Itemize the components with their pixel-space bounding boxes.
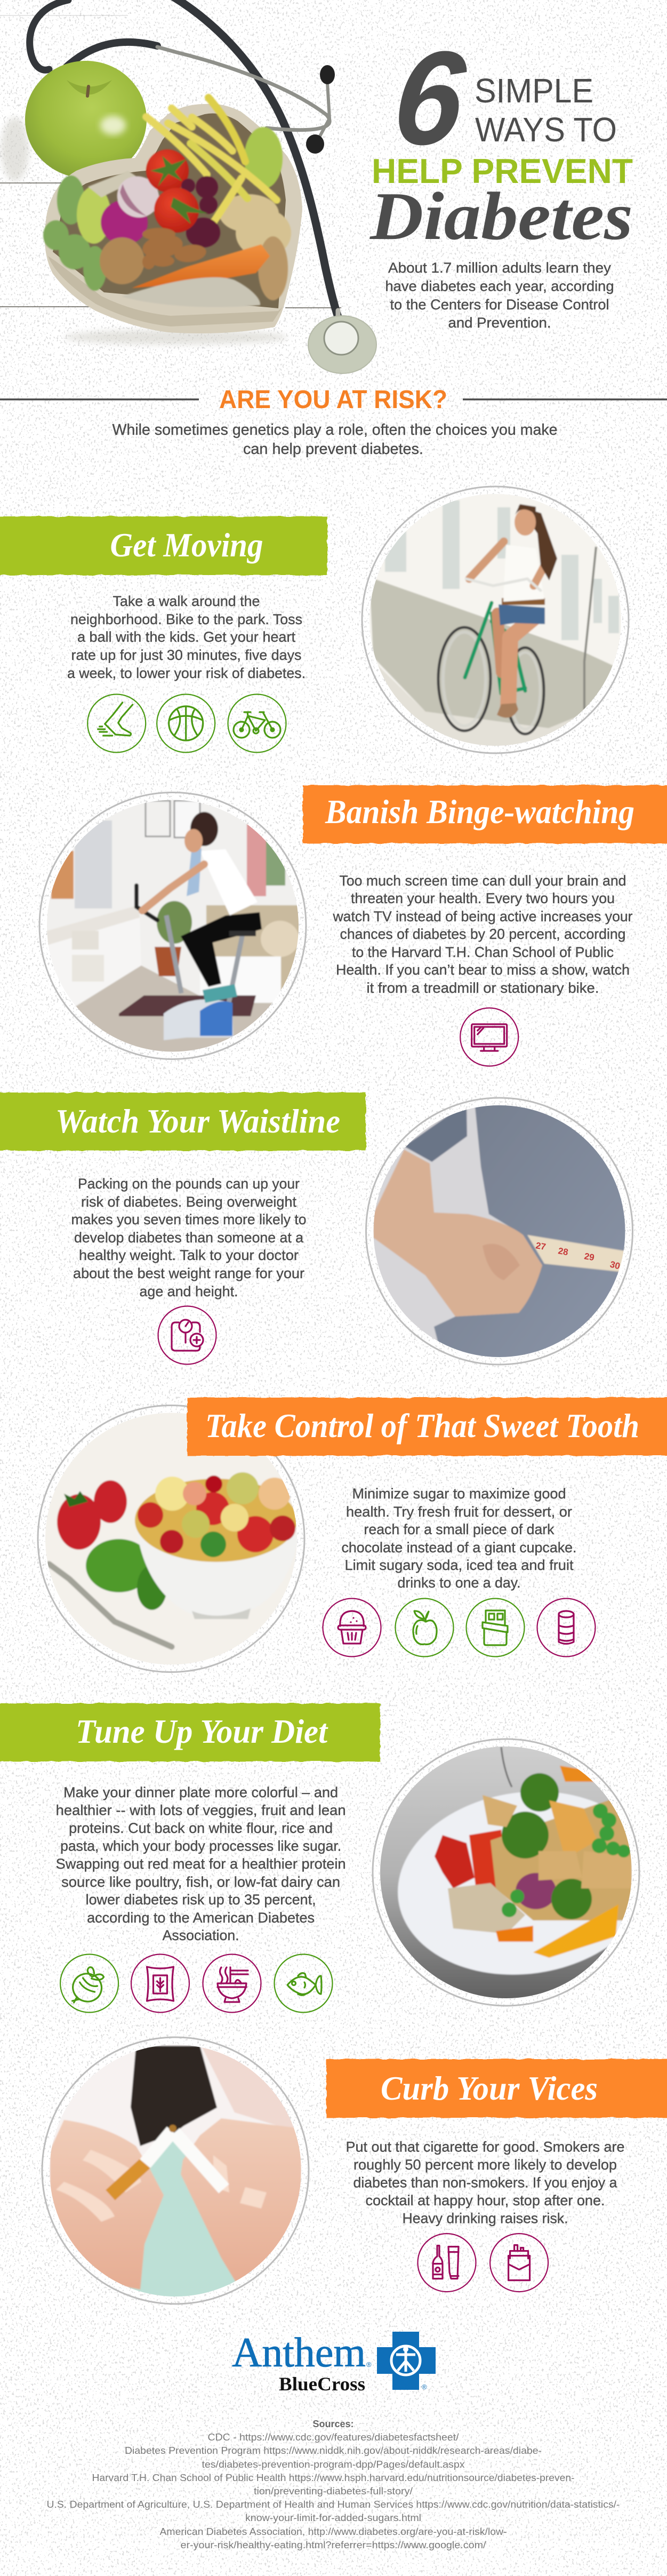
body text: sweet tooth: Limit sugary soda, iced tea and fruit	[344, 1557, 574, 1573]
body text: tune up your diet: Swapping out red meat for a healthier protein	[56, 1856, 346, 1872]
tape measure numbers: 28	[557, 1246, 569, 1257]
banner: get moving	[0, 516, 327, 575]
panel: tune up your diet	[0, 1703, 664, 2012]
body text: sweet tooth	[341, 1486, 577, 1591]
sources: Sources:	[312, 2418, 354, 2429]
photo: woman cycling	[362, 487, 629, 753]
risk intro text: can help prevent diabetes.	[243, 441, 423, 458]
photo: measuring waist	[366, 1098, 632, 1365]
panel: hero photo of heart bowl, apple and stethoscope	[0, 0, 376, 373]
icon: stethoscope	[30, 0, 376, 373]
body text: watch your waistline: about the best weight range for your	[73, 1265, 304, 1281]
body text: banish binge-watching	[333, 873, 633, 996]
body text: banish binge-watching: watch TV instead of being active increases your	[333, 908, 633, 924]
photo: vegetable and tofu plate	[373, 1739, 664, 2006]
tape measure numbers: 29	[583, 1251, 595, 1263]
sources: tes/diabetes-prevention-program-dpp/Pages/default.aspx	[202, 2459, 465, 2470]
body text: tune up your diet: proteins. Cut back on white flour, rice and	[69, 1820, 333, 1836]
section heading: are you at risk	[0, 386, 667, 414]
intro text: About 1.7 million adults learn they	[388, 260, 612, 276]
logo: registered mark left: ®	[366, 2360, 372, 2368]
banner: watch your waistline: Watch Your Waistline	[55, 1102, 340, 1140]
intro text: and Prevention.	[448, 315, 551, 331]
body text: sweet tooth: reach for a small piece of dark	[364, 1521, 555, 1537]
body text: tune up your diet: Make your dinner plate more colorful – and	[63, 1784, 338, 1800]
body text: tune up your diet	[56, 1784, 346, 1943]
intro text	[385, 260, 614, 331]
title line: diabetes: Diabetes	[369, 178, 633, 254]
body text: curb your vices: cocktail at happy hour, stop after one.	[366, 2192, 605, 2208]
body text: get moving: a week, to lower your risk of diabetes.	[67, 665, 306, 681]
wood plank gaps	[0, 15, 341, 308]
icon: cigarette pack	[490, 2234, 548, 2292]
icon: cupcake	[323, 1598, 381, 1657]
icon: bicycle	[228, 695, 286, 752]
icon: green apple	[25, 61, 147, 178]
banner: watch your waistline	[0, 1092, 366, 1151]
body text: tune up your diet: Association.	[163, 1927, 239, 1943]
body text: tune up your diet: lower diabetes risk up to 35 percent,	[86, 1892, 316, 1908]
logo: anthem bluecross	[232, 2329, 436, 2395]
risk intro text: While sometimes genetics play a role, often the choices you make	[112, 421, 558, 438]
body text: watch your waistline: healthy weight. Talk to your doctor	[79, 1247, 299, 1263]
body text: watch your waistline	[71, 1176, 306, 1299]
icon: soda can	[537, 1598, 595, 1657]
icon: chocolate bar	[466, 1598, 525, 1657]
photo: hands breaking cigarette	[42, 2037, 309, 2304]
title line: simple: SIMPLE	[475, 71, 593, 110]
logo: blue cross symbol	[377, 2332, 436, 2390]
body text: banish binge-watching: to the Harvard T.H. Chan School of Public	[352, 944, 614, 960]
sources: Harvard T.H. Chan School of Public Health https://www.hsph.harvard.edu/nutritionsource/diabetes-preven-	[92, 2472, 575, 2483]
body text: banish binge-watching: Health. If you can’t bear to miss a show, watch	[336, 962, 630, 978]
icon: basketball	[157, 695, 215, 752]
section heading: are you at risk: ARE YOU AT RISK?	[219, 386, 447, 414]
icon: apple	[396, 1598, 453, 1657]
banner: take control of that sweet tooth: Take Control of That Sweet Tooth	[205, 1407, 639, 1445]
body text: get moving	[67, 593, 306, 681]
banner: curb your vices	[326, 2059, 667, 2118]
banner: get moving: Get Moving	[110, 526, 263, 564]
sources: er-your-risk/healthy-eating.html?referrer=https://www.google.com/	[180, 2539, 486, 2550]
body text: tune up your diet: pasta, which your body processes like sugar.	[60, 1838, 341, 1854]
banner: banish binge-watching: Banish Binge-watching	[325, 793, 634, 831]
sources: American Diabetes Association, http://www.diabetes.org/are-you-at-risk/low-	[160, 2526, 507, 2537]
banner: take control of that sweet tooth	[187, 1398, 667, 1456]
body text: sweet tooth: chocolate instead of a giant cupcake.	[341, 1540, 577, 1556]
panel: watch your waistline	[0, 1092, 632, 1365]
title numeral 6: 6	[387, 24, 472, 173]
title line: help prevent: HELP PREVENT	[372, 151, 633, 190]
body text: tune up your diet: healthier -- with lots of veggies, fruit and lean	[56, 1803, 346, 1819]
panel: take control of that sweet tooth	[38, 1398, 667, 1672]
body text: watch your waistline: Packing on the pounds can up your	[78, 1176, 300, 1192]
body text: curb your vices: Put out that cigarette for good. Smokers are	[345, 2139, 625, 2155]
icon: bottle and glass	[418, 2234, 476, 2292]
body text: sweet tooth: Minimize sugar to maximize good	[352, 1486, 566, 1502]
bowl food	[43, 98, 291, 307]
icon: beet	[60, 1955, 118, 2012]
body text: curb your vices: roughly 50 percent more likely to develop	[353, 2157, 617, 2173]
body text: banish binge-watching: chances of diabetes by 20 percent, according	[340, 926, 626, 942]
body text: get moving: neighborhood. Bike to the park. Toss	[70, 611, 302, 627]
body text: curb your vices: diabetes than non-smokers. If you enjoy a	[353, 2174, 617, 2190]
heart bowl	[45, 104, 302, 333]
body text: banish binge-watching: threaten your health. Every two hours you	[351, 890, 615, 906]
icon: flour bag	[131, 1955, 189, 2012]
banner: tune up your diet: Tune Up Your Diet	[76, 1712, 328, 1750]
panel: get moving	[0, 487, 629, 753]
tape measure numbers	[535, 1242, 620, 1269]
body text: banish binge-watching: Too much screen time can dull your brain and	[339, 873, 626, 889]
shadow below bowl and apple	[1, 117, 288, 345]
body text: tune up your diet: according to the American Diabetes	[87, 1910, 315, 1926]
intro text: have diabetes each year, according	[385, 278, 614, 294]
body text: curb your vices: Heavy drinking raises risk.	[402, 2211, 568, 2227]
sources: know-your-limit-for-added-sugars.html	[245, 2512, 421, 2523]
body text: watch your waistline: makes you seven times more likely to	[71, 1211, 306, 1227]
body text: banish binge-watching: it from a treadmill or stationary bike.	[367, 980, 599, 996]
body text: watch your waistline: develop diabetes than someone at a	[74, 1230, 304, 1246]
photo: fruit salad bowl	[38, 1405, 304, 1672]
banner: tune up your diet	[0, 1703, 380, 1761]
logo wordmark: bluecross: BlueCross	[279, 2373, 365, 2395]
tape measure numbers: 27	[535, 1240, 547, 1252]
sources: tion/preventing-diabetes-full-story/	[254, 2485, 413, 2497]
body text: get moving: rate up for just 30 minutes, five days	[71, 647, 302, 663]
icon: television	[460, 1008, 518, 1066]
body text: tune up your diet: source like poultry, fish, or low-fat dairy can	[61, 1874, 340, 1890]
risk intro text	[112, 421, 558, 458]
panel: curb your vices	[42, 2037, 667, 2304]
body text: get moving: Take a walk around the	[113, 593, 260, 609]
sources: CDC - https://www.cdc.gov/features/diabetesfactsheet/	[208, 2431, 459, 2443]
panel: banish binge-watching	[39, 785, 667, 1066]
body text: get moving: a ball with the kids. Get your heart	[77, 629, 295, 645]
body text: watch your waistline: risk of diabetes. Being overweight	[81, 1194, 296, 1210]
icon: scale with plus sign	[158, 1306, 216, 1365]
title line: ways to: WAYS TO	[475, 110, 617, 149]
body text: watch your waistline: age and height.	[140, 1283, 238, 1299]
tape measure numbers: 30	[609, 1259, 621, 1271]
icon: noodle bowl	[203, 1955, 261, 2012]
title	[369, 24, 633, 254]
banner: curb your vices: Curb Your Vices	[381, 2069, 598, 2107]
body text: sweet tooth: drinks to one a day.	[398, 1575, 520, 1591]
logo wordmark: anthem: Anthem	[232, 2329, 366, 2375]
banner: banish binge-watching	[303, 785, 667, 843]
sources: U.S. Department of Agriculture, U.S. Department of Health and Human Services https://www.cdc.gov/nutrition/data-statistics/-	[47, 2499, 620, 2510]
body text: sweet tooth: health. Try fresh fruit for dessert, or	[346, 1504, 572, 1520]
intro text: to the Centers for Disease Control	[390, 297, 609, 313]
sources	[47, 2418, 620, 2550]
body text: curb your vices	[345, 2139, 625, 2227]
sources: Diabetes Prevention Program https://www.niddk.nih.gov/about-niddk/research-areas/diabe-	[125, 2445, 542, 2456]
icon: running shoe	[87, 695, 146, 752]
logo: registered mark right: ®	[422, 2383, 427, 2391]
photo: woman on stationary bike	[39, 793, 306, 1059]
icon: fish	[274, 1955, 333, 2012]
